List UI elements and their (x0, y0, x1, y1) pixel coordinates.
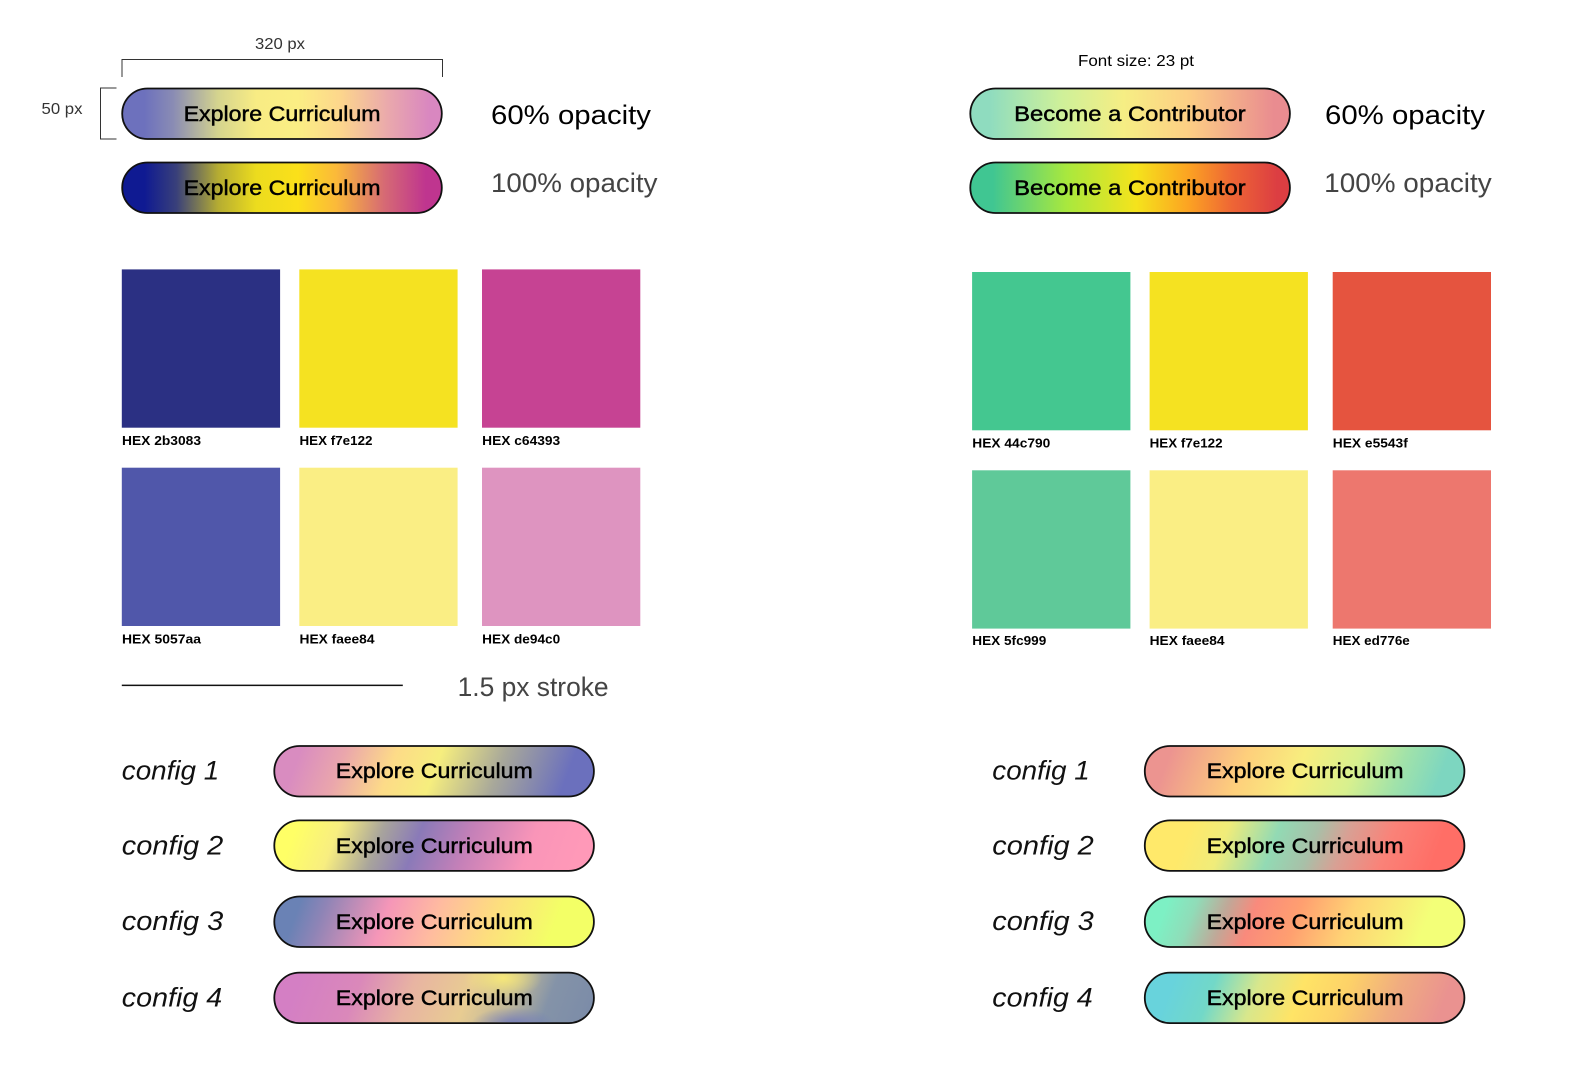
label: 60% opacity: 60% opacity (491, 100, 652, 130)
config 2 row: Explore Curriculum (1207, 835, 1404, 858)
swatch de94c0 (482, 468, 640, 646)
config 4 row: config 4 (122, 982, 222, 1012)
config 3 row: Explore Curriculum (336, 911, 533, 934)
config 3 row: config 3 (992, 906, 1094, 936)
height dimension bracket (42, 88, 116, 139)
swatch f7e122: HEX f7e122 (1150, 436, 1223, 450)
label: 100% opacity: 100% opacity (1324, 168, 1492, 198)
config 4 row: config 4 (992, 982, 1093, 1012)
button: 60% opacity green-red: Become a Contributor (1014, 103, 1246, 126)
panel: left gradient configurations (122, 746, 594, 1023)
panel: right gradient configurations (992, 746, 1464, 1023)
config 1 row: config 1 (992, 756, 1090, 786)
swatch 2b3083 (122, 269, 280, 448)
panel: right colour swatches (972, 272, 1491, 648)
config 4 row: Explore Curriculum (336, 987, 533, 1010)
config 1 row (992, 746, 1464, 796)
config 3 row (122, 896, 594, 947)
button: 100% opacity blue-pink: Explore Curriculum (184, 177, 381, 200)
config 2 row: config 2 (122, 830, 223, 860)
swatch c64393 (482, 269, 640, 448)
swatch 44c790: HEX 44c790 (972, 436, 1050, 450)
swatch de94c0: HEX de94c0 (482, 632, 560, 646)
panel: left colour swatches (122, 269, 640, 646)
swatch e5543f: HEX e5543f (1333, 436, 1409, 450)
swatch 5fc999: HEX 5fc999 (972, 634, 1046, 648)
swatch 5057aa: HEX 5057aa (122, 632, 202, 646)
button: 60% opacity blue-pink: Explore Curriculum (184, 103, 381, 126)
label: 100% opacity: 100% opacity (491, 168, 658, 198)
config 2 row: Explore Curriculum (336, 835, 533, 858)
button: 60% opacity green-red (970, 88, 1290, 139)
width dimension bracket (122, 36, 442, 77)
config 2 row: config 2 (992, 830, 1094, 860)
config 1 row (122, 746, 594, 796)
swatch e5543f (1333, 272, 1491, 450)
panel: right button specs (970, 53, 1492, 213)
stroke specification: 1.5 px stroke (458, 672, 609, 702)
swatch faee84 (299, 468, 458, 646)
swatch ed776e (1333, 470, 1491, 648)
config 1 row: config 1 (122, 756, 219, 786)
swatch ed776e: HEX ed776e (1333, 634, 1410, 648)
note: font size: Font size: 23 pt (1078, 53, 1195, 70)
config 4 row: Explore Curriculum (1207, 987, 1404, 1010)
button: 60% opacity blue-pink (122, 88, 442, 139)
config 4 row (992, 973, 1464, 1023)
panel: left button specs (122, 88, 658, 213)
swatch f7e122 (1150, 272, 1308, 450)
swatch 44c790 (972, 272, 1130, 450)
width dimension bracket: 320 px (255, 36, 305, 53)
swatch 5057aa (122, 468, 280, 646)
swatch f7e122 (299, 269, 458, 448)
swatch f7e122: HEX f7e122 (300, 434, 373, 448)
swatch faee84 (1150, 470, 1308, 648)
config 3 row (992, 896, 1464, 947)
height dimension bracket: 50 px (42, 101, 83, 118)
button: 100% opacity green-red: Become a Contributor (1014, 177, 1246, 200)
config 1 row: Explore Curriculum (336, 760, 533, 783)
config 3 row: config 3 (122, 906, 223, 936)
config 2 row (992, 820, 1464, 871)
swatch faee84: HEX faee84 (1150, 634, 1225, 648)
swatch 2b3083: HEX 2b3083 (122, 434, 201, 448)
button: 100% opacity blue-pink (122, 162, 442, 213)
label: 60% opacity: 60% opacity (1325, 100, 1486, 130)
config 4 row (122, 973, 594, 1023)
config 2 row (122, 820, 594, 871)
swatch 5fc999 (972, 470, 1130, 648)
swatch faee84: HEX faee84 (300, 632, 375, 646)
config 3 row: Explore Curriculum (1207, 911, 1404, 934)
swatch c64393: HEX c64393 (482, 434, 560, 448)
config 1 row: Explore Curriculum (1207, 760, 1404, 783)
button: 100% opacity green-red (970, 162, 1290, 213)
